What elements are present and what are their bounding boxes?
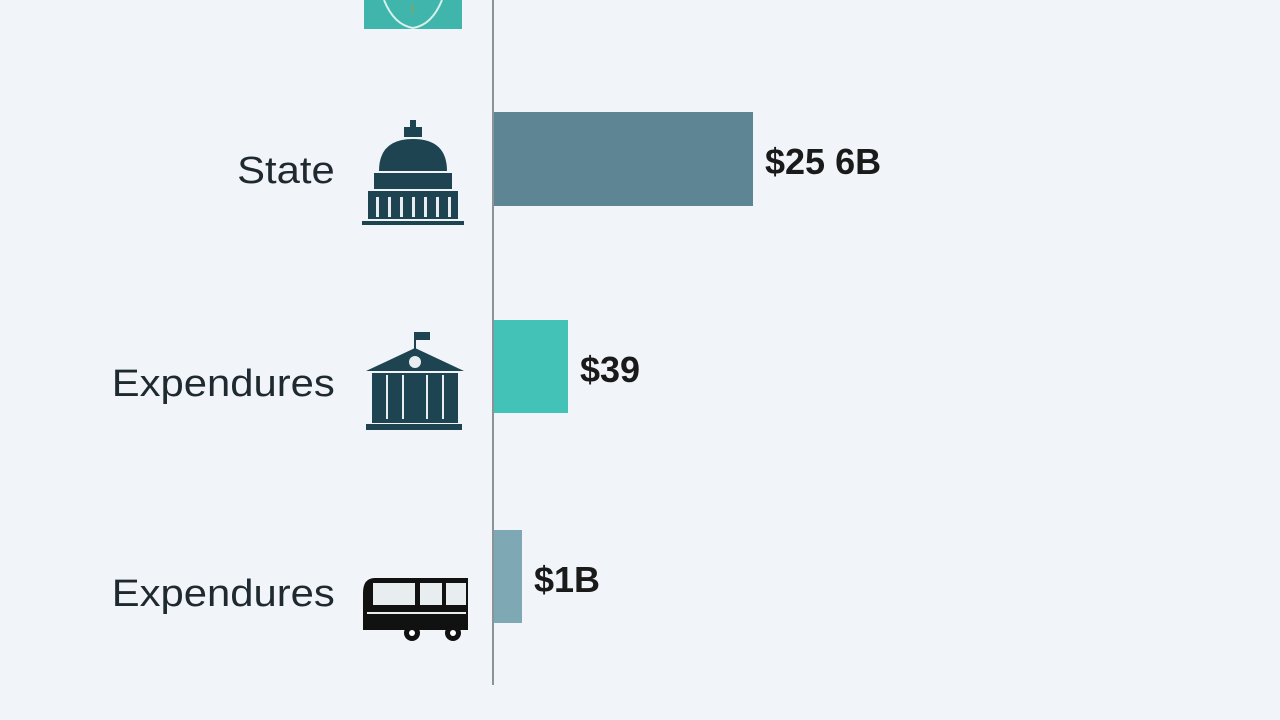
value: $1B bbox=[534, 559, 600, 600]
label: Expendures: Expendures bbox=[112, 573, 335, 615]
row: Expendures 2 bbox=[112, 530, 600, 641]
icon: capitol bbox=[362, 120, 464, 225]
bar: Expendures 2 bbox=[494, 530, 522, 623]
bar: State bbox=[494, 112, 753, 206]
label: Expendures: Expendures bbox=[112, 363, 335, 405]
icon: doctor (cropped) bbox=[364, 0, 462, 29]
value: $39 bbox=[580, 349, 640, 390]
row: Expendures 1 bbox=[112, 320, 640, 430]
row: State bbox=[237, 112, 881, 225]
axis line bbox=[492, 0, 494, 685]
icon: bus bbox=[363, 578, 468, 641]
label: State: State bbox=[237, 150, 335, 192]
bar: Expendures 1 bbox=[494, 320, 568, 413]
icon: school bbox=[366, 332, 464, 430]
value: State: $25 6B bbox=[765, 141, 881, 182]
